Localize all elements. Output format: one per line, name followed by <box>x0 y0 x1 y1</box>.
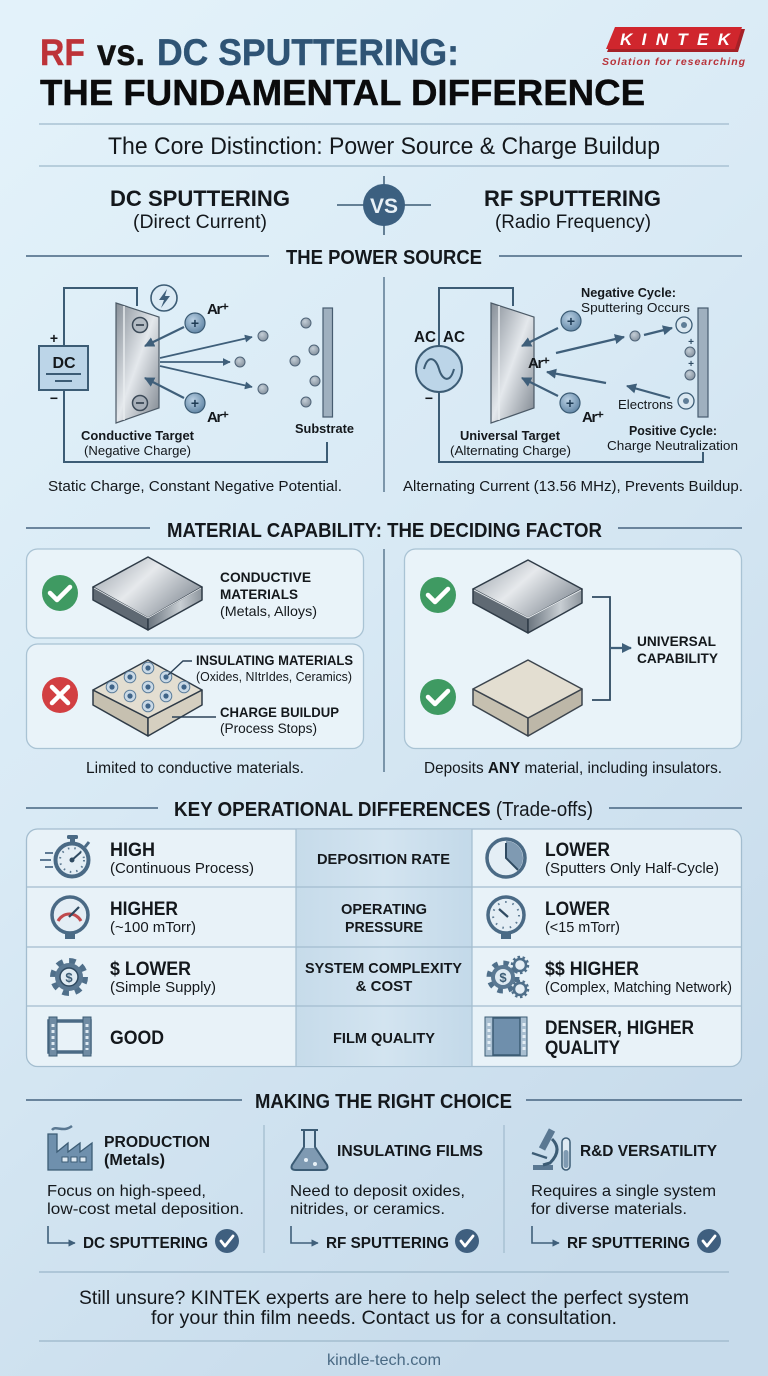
metal slab <box>473 560 582 633</box>
title: RF <box>40 32 85 73</box>
choice: R&D versatility: Requires a single system <box>531 1183 716 1200</box>
icon: dollar gear: $ <box>65 970 73 985</box>
argon ions: Ar⁺ <box>207 409 229 426</box>
label: negative cycle: Negative Cycle: <box>581 286 676 300</box>
row: operating pressure <box>52 897 620 939</box>
sputtered atoms <box>235 318 320 407</box>
row: system complexity and cost: $ LOWER <box>110 959 191 980</box>
heading: RF sputtering: (Radio Frequency) <box>495 212 651 233</box>
title: THE FUNDAMENTAL DIFFERENCE <box>40 72 645 113</box>
label: positive cycle: Positive Cycle: <box>629 424 717 438</box>
section heading: making the right choice: MAKING THE RIGHT CHOICE <box>255 1091 512 1113</box>
result: DC sputtering <box>48 1226 239 1253</box>
row: system complexity and cost: & COST <box>356 978 412 995</box>
row: film quality: FILM QUALITY <box>333 1030 435 1047</box>
logo: KINTEK: Solation for researching <box>602 56 746 68</box>
panel: insulating materials <box>26 644 364 748</box>
label: electrons: Electrons <box>618 397 673 412</box>
icon: dollar gears: $ <box>499 970 507 985</box>
comparison table <box>26 829 742 1066</box>
icon: dense film strip <box>485 1017 527 1056</box>
icon: flask <box>292 1130 328 1170</box>
substrate <box>698 308 708 417</box>
choice: production metals: Focus on high-speed, <box>47 1183 206 1200</box>
icon: DC power supply <box>39 330 88 406</box>
call to action <box>79 1288 689 1329</box>
choice: R&D versatility <box>531 1130 721 1253</box>
result: RF sputtering: RF SPUTTERING <box>326 1235 449 1252</box>
substrate: Substrate <box>295 422 354 436</box>
target label <box>81 429 195 458</box>
icon: DC power supply: + <box>50 330 58 346</box>
label: universal target <box>450 429 571 458</box>
ceramic slab with charge <box>93 660 202 736</box>
row: deposition rate: LOWER <box>545 840 610 861</box>
universal target plate <box>491 303 534 423</box>
choice: insulating films: Need to deposit oxides, <box>290 1183 465 1200</box>
icon: green check <box>420 577 456 613</box>
arrows: charge flow <box>522 328 672 398</box>
vs badge <box>337 176 431 235</box>
row: deposition rate: (Continuous Process) <box>110 860 254 877</box>
target label: (Negative Charge) <box>84 444 191 458</box>
argon ions <box>185 301 229 426</box>
result: RF sputtering <box>532 1226 721 1253</box>
heading: DC sputtering: (Direct Current) <box>133 212 267 233</box>
caption: Static Charge, Constant Negative Potential. <box>48 478 342 495</box>
result: DC sputtering: DC SPUTTERING <box>83 1235 208 1252</box>
argon ions <box>528 311 604 426</box>
argon ions: + <box>191 395 199 411</box>
row: operating pressure: PRESSURE <box>345 919 423 936</box>
row: deposition rate: (Sputters Only Half-Cycle) <box>545 860 719 877</box>
call to action: Still unsure? KINTEK experts are here to help select the perfect system <box>79 1288 689 1309</box>
icon: red cross <box>42 677 78 713</box>
icon: dollar gear <box>54 962 84 992</box>
label <box>220 569 317 619</box>
row: operating pressure: LOWER <box>545 899 610 920</box>
title: vs. <box>97 32 145 73</box>
conductive target plate <box>116 303 159 423</box>
label: universal target: (Alternating Charge) <box>450 444 571 458</box>
choice: insulating films: nitrides, or ceramics. <box>290 1201 445 1218</box>
row: operating pressure: HIGHER <box>110 899 178 920</box>
argon ions: Ar⁺ <box>528 355 550 372</box>
choice: production metals <box>47 1126 244 1253</box>
row: deposition rate: HIGH <box>110 840 155 861</box>
heading: RF sputtering <box>484 186 661 233</box>
row: film quality: DENSER, HIGHER <box>545 1018 694 1039</box>
call to action: for your thin film needs. Contact us for a consultation. <box>151 1308 617 1329</box>
panel: RF power source diagram <box>403 286 743 495</box>
icon: AC power supply: AC <box>414 329 436 346</box>
row: system complexity and cost: SYSTEM COMPLEXITY <box>305 960 462 977</box>
section heading: material capability: MATERIAL CAPABILITY: THE DECIDING FACTOR <box>167 520 603 542</box>
choice: production metals: low-cost metal deposition. <box>47 1201 244 1218</box>
choice: production metals: PRODUCTION <box>104 1134 210 1151</box>
label: positive cycle: Charge Neutralization <box>607 439 738 453</box>
argon ions: + <box>566 395 574 411</box>
ceramic slab <box>473 660 582 736</box>
icon: factory <box>48 1126 92 1170</box>
label: negative cycle: Sputtering Occurs <box>581 301 690 315</box>
atoms and electrons at substrate <box>630 317 695 409</box>
label: CAPABILITY <box>637 650 719 666</box>
result: RF sputtering <box>291 1226 479 1253</box>
caption: Alternating Current (13.56 MHz), Prevents Buildup. <box>403 478 743 495</box>
logo: KINTEK <box>602 27 746 68</box>
bracket arrow <box>592 597 631 700</box>
caption: deposits any: Deposits ANY material, including insulators. <box>424 760 722 777</box>
row: film quality: GOOD <box>110 1028 164 1049</box>
icon: high pressure gauge <box>52 897 88 939</box>
label: UNIVERSAL <box>637 633 716 649</box>
panel: conductive materials <box>26 549 364 638</box>
title: DC SPUTTERING: <box>157 32 459 73</box>
label: universal target: Universal Target <box>460 429 561 443</box>
row: deposition rate: DEPOSITION RATE <box>317 851 450 868</box>
label: (Oxides, NItrIdes, Ceramics) <box>196 669 352 684</box>
choice: production metals: (Metals) <box>104 1152 165 1169</box>
label: negative cycle <box>581 286 690 315</box>
icon: DC power supply: DC <box>52 355 76 372</box>
icon: low pressure gauge <box>488 897 524 939</box>
arrows: ion bombardment and sputtered atoms <box>145 327 252 398</box>
row: operating pressure: OPERATING <box>341 901 427 918</box>
icon: dollar gears <box>490 957 528 997</box>
atoms and electrons at substrate: + <box>688 337 694 348</box>
argon ions: + <box>567 313 575 329</box>
label: (Process Stops) <box>220 721 317 736</box>
row: system complexity and cost: $$ HIGHER <box>545 959 639 980</box>
section heading: the power source: THE POWER SOURCE <box>286 247 482 269</box>
label: positive cycle <box>607 424 738 453</box>
section heading: key operational differences: KEY OPERATIONAL DIFFERENCES (Trade-offs) <box>174 799 593 821</box>
argon ions: Ar⁺ <box>207 301 229 318</box>
substrate <box>295 308 354 436</box>
row: operating pressure: (~100 mTorr) <box>110 919 196 936</box>
choice: R&D versatility: for diverse materials. <box>531 1201 687 1218</box>
row: film quality <box>49 1017 694 1059</box>
choice: insulating films: INSULATING FILMS <box>337 1143 483 1160</box>
icon: DC power supply: − <box>50 390 58 406</box>
icon: green check <box>420 679 456 715</box>
label: (Metals, Alloys) <box>220 603 317 619</box>
icon: lightning bolt <box>151 285 177 311</box>
heading: DC sputtering <box>110 186 290 233</box>
panel: DC power source diagram <box>39 285 354 495</box>
row: film quality: QUALITY <box>545 1038 620 1059</box>
title <box>40 32 645 113</box>
footer url: kindle-tech.com <box>327 1352 441 1369</box>
icon: stopwatch <box>40 835 89 876</box>
icon: half-cycle clock <box>487 839 525 877</box>
icon: green check <box>42 575 78 611</box>
choice: insulating films <box>290 1130 483 1253</box>
subtitle: The Core Distinction: Power Source & Charge Buildup <box>108 133 660 160</box>
row: operating pressure: (<15 mTorr) <box>545 919 620 936</box>
logo: KINTEK: KINTEK <box>620 30 732 49</box>
vs badge: VS <box>370 195 398 218</box>
choice: R&D versatility: R&D VERSATILITY <box>580 1143 717 1160</box>
row: system complexity and cost: (Simple Supply) <box>110 979 216 996</box>
metal slab <box>93 557 202 630</box>
icon: AC power supply <box>414 329 465 406</box>
caption: limited: Limited to conductive materials. <box>86 760 304 777</box>
icon: AC power supply: − <box>425 390 433 406</box>
row: system complexity and cost <box>54 957 732 997</box>
row: system complexity and cost: (Complex, Matching Network) <box>545 979 732 996</box>
icon: open film strip <box>49 1017 91 1056</box>
panel: universal capability <box>404 549 742 748</box>
label: CONDUCTIVE <box>220 569 311 585</box>
argon ions: + <box>191 315 199 331</box>
icon: microscope and test tube <box>532 1130 570 1170</box>
label: INSULATING MATERIALS <box>196 653 353 668</box>
label <box>196 653 353 736</box>
row: deposition rate <box>40 835 719 877</box>
label: CHARGE BUILDUP <box>220 705 339 720</box>
label: MATERIALS <box>220 586 298 602</box>
atoms and electrons at substrate: + <box>688 359 694 370</box>
heading: RF sputtering: RF SPUTTERING <box>484 186 661 211</box>
target label: Conductive Target <box>81 429 195 443</box>
heading: DC sputtering: DC SPUTTERING <box>110 186 290 211</box>
argon ions: Ar⁺ <box>582 409 604 426</box>
result: RF sputtering: RF SPUTTERING <box>567 1235 690 1252</box>
icon: AC power supply: AC <box>443 329 465 346</box>
label <box>637 633 719 666</box>
